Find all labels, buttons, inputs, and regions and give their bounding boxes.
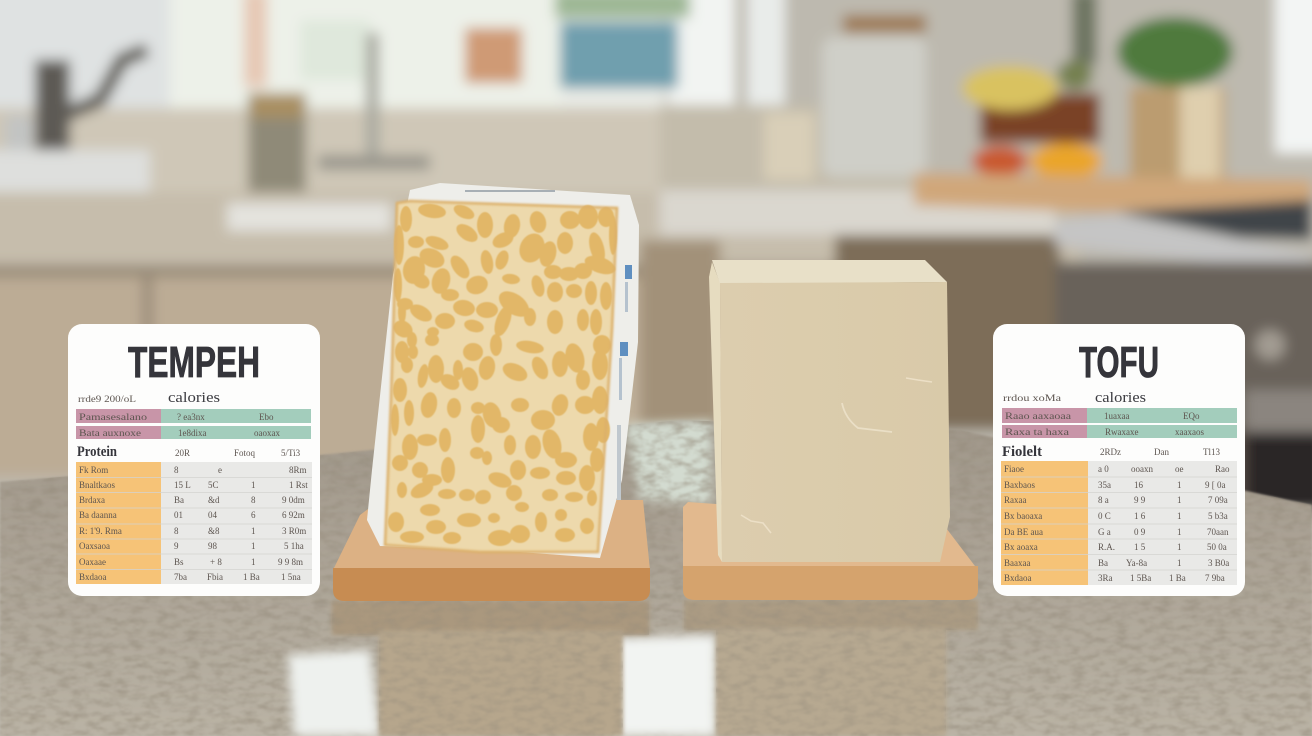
nutrient table: Da BE aua (1004, 527, 1043, 537)
serving and calories line (78, 390, 220, 406)
tempeh face (385, 201, 617, 552)
nutrient table: Bs (174, 557, 184, 567)
nutrition card: tempeh (68, 324, 320, 596)
nutrient table: oe (1175, 464, 1184, 474)
protein header row (77, 444, 301, 460)
nutrient table: 8 (251, 495, 256, 505)
serving and calories line (1003, 390, 1146, 406)
nutrient table: 8 (174, 526, 179, 536)
tempeh block in paper wrapper (367, 183, 639, 558)
nutrient table: 70aan (1207, 527, 1229, 537)
protein header row: 5/Ti3 (281, 448, 301, 458)
nutrient table: 3Ra (1098, 573, 1113, 583)
tempeh soybeans (388, 202, 618, 546)
nutrient table: 5C (208, 480, 219, 490)
plant pot (1130, 87, 1225, 182)
nutrient table: 1 (1177, 480, 1182, 490)
wrapper blue print (465, 190, 632, 500)
nutrient table: 7ba (174, 572, 187, 582)
pink and green summary rows: Bata auxnoxe (79, 428, 141, 438)
nutrient table: R: 1'9. Rma (79, 526, 122, 536)
nutrient table: Brdaxa (79, 495, 105, 505)
nutrient table: 5 1ha (284, 541, 304, 551)
nutrient table: Bxdaoa (1004, 573, 1032, 583)
nutrient table: 5 b3a (1208, 511, 1228, 521)
protein header row: Dan (1154, 447, 1169, 457)
nutrient table: 9 0dm (282, 495, 305, 505)
wooden board: tofu (683, 502, 978, 600)
serving and calories line: calories (168, 390, 220, 406)
nutrient table: Rao (1215, 464, 1230, 474)
nutrient table: 0 9 (1134, 527, 1146, 537)
paper wrapper (367, 183, 639, 558)
nutrient table: 1 (251, 557, 256, 567)
protein header row: Fiolelt (1002, 444, 1042, 460)
nutrient table: + 8 (210, 557, 222, 567)
nutrient table: 04 (208, 510, 218, 520)
pink and green summary rows (76, 409, 311, 439)
jars (764, 113, 814, 180)
nutrient table: 6 92m (282, 510, 305, 520)
nutrient table: 1 5Ba (1130, 573, 1151, 583)
pink and green summary rows: Raxa ta haxa (1005, 427, 1069, 437)
nutrient table: 01 (174, 510, 183, 520)
serving and calories line: rrdou xoMa (1003, 393, 1061, 403)
nutrient table: 35a (1098, 480, 1111, 490)
protein header row: 20R (175, 448, 190, 458)
pink and green summary rows: ? ea3nx (177, 412, 205, 422)
nutrient table: a 0 (1098, 464, 1109, 474)
serving and calories line: rrde9 200/oL (78, 394, 136, 404)
backsplash (0, 108, 800, 198)
nutrient table: 50 0a (1207, 542, 1227, 552)
pink and green summary rows: Raao aaxaoaa (1005, 411, 1071, 421)
cabinets (0, 265, 840, 277)
nutrient table: 9 (174, 541, 179, 551)
nutrient table: 1 (1177, 558, 1182, 568)
nutrient table: 98 (208, 541, 218, 551)
nutrient table: 3 R0m (282, 526, 306, 536)
pink and green summary rows: Ebo (259, 412, 274, 422)
nutrient table: 1 (251, 541, 256, 551)
nutrition card: tofu (993, 324, 1245, 596)
nutrient table: 7 9ba (1205, 573, 1225, 583)
nutrient table: 1 (251, 526, 256, 536)
tofu top face (712, 260, 947, 284)
nutrient table: 6 (251, 510, 256, 520)
nutrient table: &d (208, 495, 220, 505)
nutrient table: 1 6 (1134, 511, 1146, 521)
nutrient table (76, 462, 312, 584)
pink and green summary rows: Rwaxaxe (1105, 427, 1138, 437)
fruit bowl (1072, 0, 1097, 65)
pink and green summary rows: Pamasesalano (79, 412, 148, 422)
wooden board: tempeh (333, 500, 650, 601)
pink and green summary rows: 1uaxaa (1104, 411, 1129, 421)
nutrient table: 8Rm (289, 465, 307, 475)
nutrient table: 9 [ 0a (1205, 480, 1226, 490)
nutrient table: &8 (208, 526, 220, 536)
board and block reflections (288, 600, 978, 736)
nutrient table: Fbia (207, 572, 223, 582)
nutrient table: e (218, 465, 222, 475)
nutrient table: Ya-8a (1126, 558, 1147, 568)
nutrient table: R.A. (1098, 542, 1115, 552)
nutrient table: 9 9 (1134, 495, 1146, 505)
serving and calories line: calories (1095, 390, 1146, 406)
nutrient table: 15 L (174, 480, 191, 490)
nutrient table: 1 Ba (243, 572, 260, 582)
nutrient table: 8 a (1098, 495, 1109, 505)
nutrient table: 9 9 8m (278, 557, 303, 567)
nutrient table: Baaxaa (1004, 558, 1030, 568)
nutrient table: 1 (1177, 511, 1182, 521)
nutrient table: Ba (174, 495, 184, 505)
nutrient table: 1 (251, 480, 256, 490)
nutrient table: 7 09a (1208, 495, 1228, 505)
nutrient table: Bx baoaxa (1004, 511, 1042, 521)
nutrient table: 1 5na (281, 572, 301, 582)
nutrient table: 1 Rst (289, 480, 308, 490)
nutrient table: 1 (1177, 542, 1182, 552)
tempeh crust edge (385, 201, 617, 552)
wood board and stove (914, 173, 1312, 212)
nutrient table: Bnaltkaos (79, 480, 115, 490)
tofu block (709, 260, 950, 562)
tofu side edge (709, 262, 722, 562)
nutrient table: Oaxaae (79, 557, 106, 567)
faucets (52, 50, 147, 190)
nutrient table: Ba daanna (79, 510, 117, 520)
pink and green summary rows: 1e8dixa (178, 428, 206, 438)
tofu front face (720, 282, 950, 562)
nutrient table: ooaxn (1131, 464, 1153, 474)
nutrient table: Ba (1098, 558, 1108, 568)
protein header row: 2RDz (1100, 447, 1121, 457)
pink and green summary rows: EQo (1183, 411, 1200, 421)
nutrient table: Bx aoaxa (1004, 542, 1038, 552)
card title: TOFU (1079, 338, 1159, 387)
nutrient table: 1 5 (1134, 542, 1146, 552)
nutrient table: 1 (1177, 527, 1182, 537)
bright window reflection behind blocks (625, 420, 712, 505)
countertop back (0, 192, 1080, 264)
protein header row (1002, 444, 1220, 460)
nutrient table: 16 (1134, 480, 1144, 490)
nutrient table: Raxaa (1004, 495, 1026, 505)
card title: TEMPEH (128, 338, 260, 387)
nutrient table: Fk Rom (79, 465, 108, 475)
window-side sink (0, 150, 150, 230)
nutrient table: Bxdaoa (79, 572, 106, 582)
protein header row: Protein (77, 444, 118, 460)
nutrient table: Baxbaos (1004, 480, 1035, 490)
nutrient table (1001, 461, 1237, 585)
pink and green summary rows: oaoxax (254, 428, 280, 438)
pink and green summary rows: xaaxaos (1175, 427, 1204, 437)
nutrient table: G a (1098, 527, 1111, 537)
nutrient table: Oaxsaoa (79, 541, 110, 551)
nutrient table: 3 B0a (1208, 558, 1229, 568)
nutrient table: 0 C (1098, 511, 1111, 521)
nutrient table: Fiaoe (1004, 464, 1024, 474)
nutrient table: 8 (174, 465, 179, 475)
countertop: speckled granite (0, 420, 1312, 736)
protein header row: Fotoq (234, 448, 256, 458)
pink and green summary rows (1002, 408, 1237, 438)
nutrient table: 1 Ba (1169, 573, 1186, 583)
protein header row: Tl13 (1203, 447, 1220, 457)
nutrient table: 1 (1177, 495, 1182, 505)
